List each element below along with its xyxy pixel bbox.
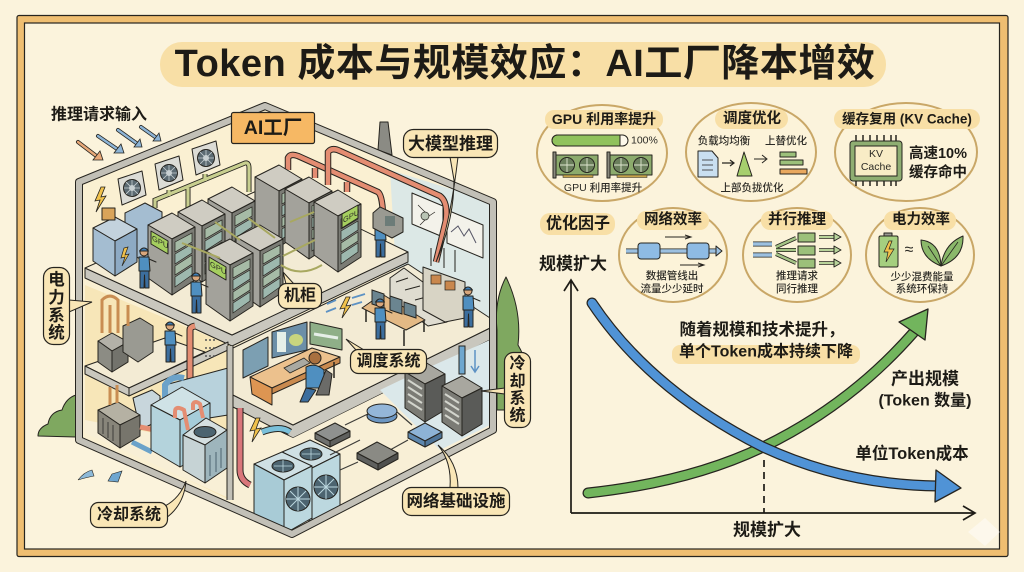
icon: input arrows: [78, 127, 161, 160]
input arrows down: [431, 248, 455, 272]
heading: inference input: 推理请求输入: [51, 104, 147, 124]
annotation: 单个Token成本持续下降: [679, 342, 853, 360]
heading: 缓存复用 (KV Cache): [842, 110, 972, 126]
x axis title: 规模扩大: [733, 520, 801, 540]
symbol: ≈: [905, 242, 914, 258]
caption: 数据管线出: [646, 269, 698, 282]
chillers: [254, 440, 340, 534]
caption: upstream: 上替优化: [765, 134, 807, 147]
label: AI factory: [232, 112, 314, 144]
label: output scale: [878, 370, 972, 410]
heading: 网络效率: [644, 210, 702, 228]
top floor: [85, 185, 408, 346]
panel: network efficiency: [619, 208, 727, 302]
cooling pipe: [262, 428, 290, 432]
callout: cooling system right: [481, 352, 530, 428]
callout: scheduling system: 调度系统: [356, 351, 421, 370]
text: hit rate: [909, 144, 967, 181]
workers top floor: [139, 217, 392, 313]
icon: chip: KV: [869, 148, 883, 160]
GPU label: GPU: [343, 207, 359, 225]
progress bar: 100%: [631, 134, 658, 146]
heading: 并行推理: [768, 210, 826, 228]
icon: parallel flow: [753, 233, 841, 268]
heading: 电力效率: [892, 210, 950, 228]
callout: large model inference: [404, 130, 498, 262]
wind debris: [78, 470, 122, 482]
callout: power system: [44, 268, 92, 344]
rack cables: [182, 212, 322, 272]
power cabinets: [93, 203, 162, 276]
network devices: [315, 404, 442, 470]
blue wall section: [380, 340, 490, 450]
icon: leaves: [921, 236, 963, 266]
caption: GPU 利用率提升: [564, 181, 643, 194]
label: unit token cost: 单位Token成本: [855, 443, 969, 463]
callout: cooling system bottom: 冷却系统: [97, 504, 161, 524]
callout: large model inference: 大模型推理: [408, 134, 493, 154]
middle floor right: [233, 264, 490, 438]
red pipe ground right: [240, 408, 250, 485]
annotation: 随着规模和技术提升，: [680, 319, 844, 339]
callout: power system: 统: [48, 322, 65, 342]
panel: scheduling optimization: [686, 103, 816, 201]
building shell: [79, 106, 493, 534]
caption: 推理请求: [776, 269, 818, 282]
scheduling desk: [243, 322, 342, 405]
rear panel: network wiring: [412, 193, 443, 237]
ground-right room floor: [233, 340, 490, 534]
caption: upper load: 上部负拢优化: [720, 181, 784, 194]
curve: token output (green): [588, 309, 928, 493]
callout: cooling system right: 冷: [509, 354, 526, 372]
cooling fans: [118, 141, 220, 205]
callout: rack: 机柜: [284, 286, 316, 304]
callout: network infrastructure: [402, 445, 510, 516]
control box: [373, 207, 403, 238]
icon: bolt: [95, 187, 106, 212]
text: hit rate: 缓存命中: [909, 163, 967, 181]
racks: [148, 165, 361, 321]
building frame: [79, 106, 493, 534]
chart: scale vs token cost: [539, 254, 975, 540]
illustration: AI factory cutaway: [78, 106, 493, 534]
icon: bolt: [250, 418, 261, 442]
icon: network pipes: [626, 235, 722, 267]
green pipes: [155, 163, 249, 208]
curve: unit token cost (blue): [592, 303, 961, 502]
caption: 系统环保持: [896, 282, 949, 295]
dashed guide: [763, 460, 765, 513]
callout: cooling system right: 却: [509, 372, 526, 390]
caption: 少少混费能量: [890, 270, 954, 283]
watermark diamond: [968, 518, 1000, 546]
icon: chip: Cache: [861, 161, 891, 173]
callout: scheduling system: [346, 339, 426, 374]
heading: 调度优化: [723, 109, 781, 127]
icon: flow: [698, 151, 807, 177]
heading: [834, 109, 980, 129]
label: output scale: (Token 数量): [878, 392, 972, 410]
callout: power system: 电: [48, 270, 65, 289]
y axis title: 规模扩大: [539, 254, 607, 274]
heading: GPU 利用率提升: [552, 111, 656, 127]
label: output scale: 产出规模: [891, 370, 959, 388]
red pipes: [288, 149, 446, 262]
panel: parallel inference: [743, 208, 851, 302]
heading: optimization factors: 优化因子: [546, 214, 610, 232]
inference console: [390, 267, 465, 326]
panel: GPU utilization: [537, 105, 667, 201]
icon: GPU cards: [553, 152, 652, 178]
ground-left cooling: [85, 368, 233, 500]
caption: load balance: 负载均均衡: [698, 134, 751, 147]
icon: left bush: [38, 395, 76, 437]
callout: network infrastructure: 网络基础设施: [406, 490, 506, 510]
callout: cooling system right: 统: [509, 406, 526, 424]
icon: battery: [879, 233, 898, 267]
middle-left room: [85, 296, 228, 396]
rear panel: trend chart: [447, 210, 483, 258]
title: Token 成本与规模效应：AI工厂降本增效: [175, 43, 875, 85]
panel: KV cache: [834, 103, 980, 201]
icon: chip: [850, 135, 902, 186]
annotation: [672, 319, 860, 364]
icon: bolt arrows: [326, 294, 365, 318]
GPU label: GPU: [152, 233, 168, 251]
callout: cooling system right: 系: [509, 388, 526, 408]
callout: rack: [278, 272, 322, 308]
panel: power efficiency: [866, 208, 974, 302]
heading: optimization factors: [540, 213, 615, 235]
worker console: [463, 287, 480, 327]
icon: right bush: [496, 277, 529, 410]
callout: power system: 力: [48, 288, 65, 307]
upper desk: [362, 290, 425, 346]
callout: cooling system bottom: [90, 481, 186, 528]
caption: 同行推理: [776, 282, 818, 295]
callout: power system: 系: [48, 305, 65, 325]
icon: chimney: [378, 122, 392, 155]
server racks ground: [405, 346, 482, 436]
label: AI factory: AI工厂: [244, 117, 302, 139]
caption: 流量少少延时: [640, 282, 704, 295]
GPU label: GPU: [210, 259, 226, 277]
axes: [564, 280, 975, 520]
text: hit rate: 高速10%: [909, 144, 967, 162]
